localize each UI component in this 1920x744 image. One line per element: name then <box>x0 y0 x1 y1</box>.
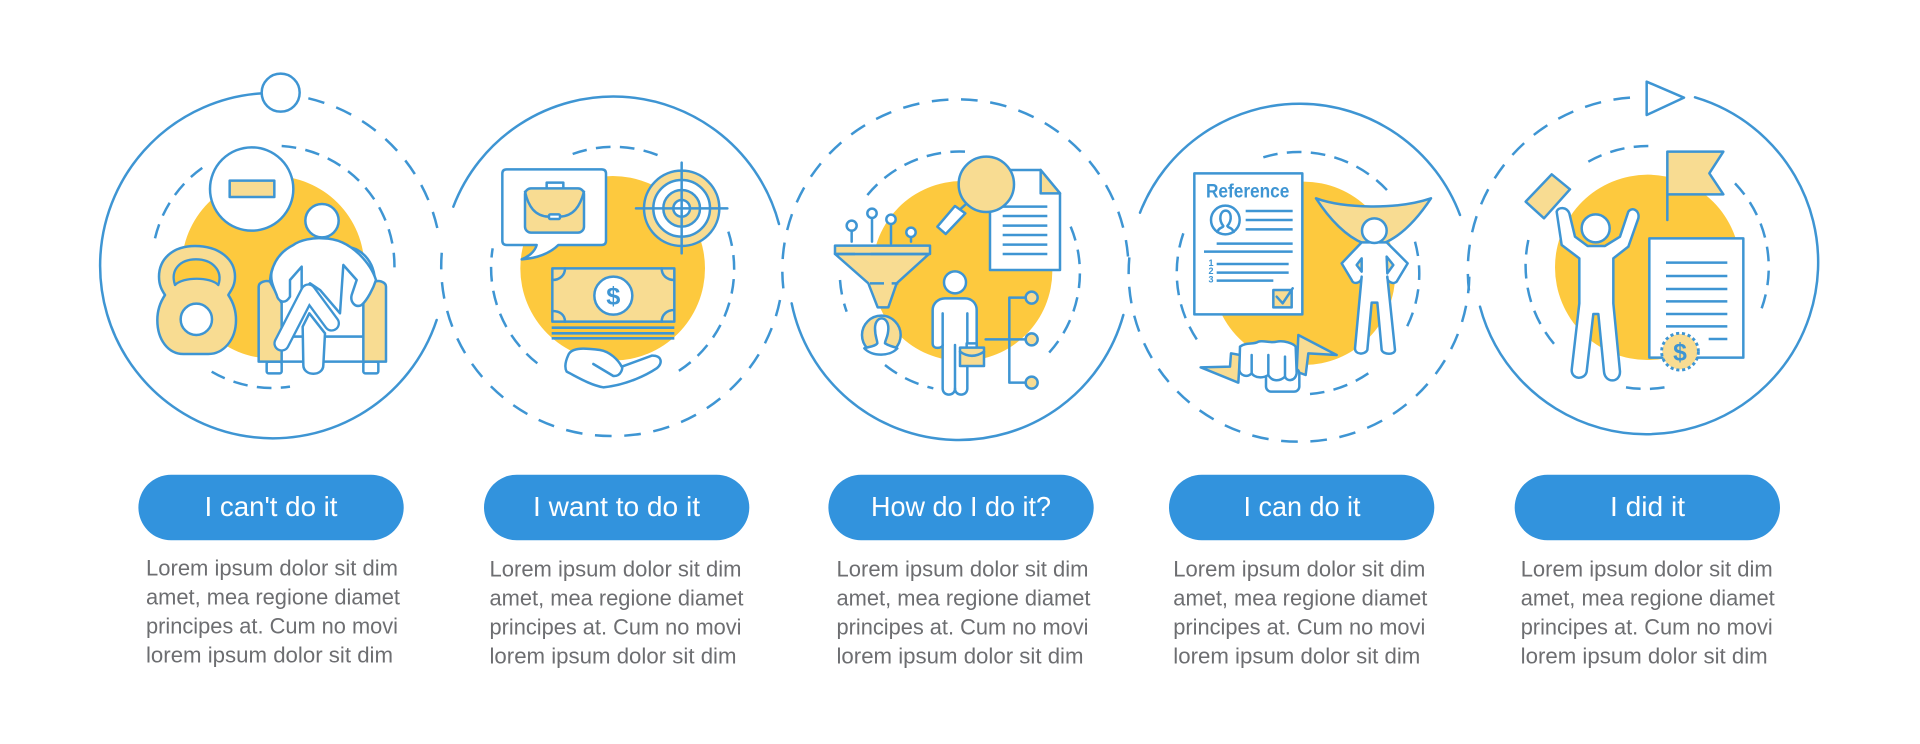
icon: kettlebell <box>157 246 236 354</box>
text block: step 5 description: lorem ipsum dolor sit dim <box>1521 643 1768 668</box>
icon: reference document <box>1194 173 1302 314</box>
outer solid ring <box>1140 104 1460 215</box>
icon: reference document: 2 <box>1208 266 1213 276</box>
text block: step 1 description: Lorem ipsum dolor sit dim <box>146 556 398 581</box>
yellow backdrop circle <box>1212 182 1395 365</box>
outer dashed ring <box>1129 247 1469 442</box>
text block: step 3 description: principes at. Cum no movi <box>836 614 1088 640</box>
yellow backdrop circle <box>1555 175 1740 360</box>
yellow backdrop circle <box>872 181 1052 361</box>
panel: I want to do it illustration <box>441 97 780 436</box>
icon: contract document <box>1649 238 1743 358</box>
icon: user avatar <box>862 316 901 355</box>
label pill: I can't do it: I can't do it <box>204 491 338 522</box>
ring start marker <box>262 74 300 112</box>
text block: step 4 description: Lorem ipsum dolor sit dim <box>1173 557 1425 582</box>
label pill: How do I do it? <box>828 475 1094 540</box>
label pill: I can do it <box>1169 475 1434 540</box>
text block: step 4 description: principes at. Cum no movi <box>1173 614 1425 640</box>
label pill: I did it <box>1515 475 1780 540</box>
icon: magnifying glass <box>937 157 1014 234</box>
icon: seated person <box>271 204 376 374</box>
panel: How do I do it illustration <box>782 99 1128 440</box>
text block: step 1 description: principes at. Cum no movi <box>146 613 398 638</box>
inner dashed ring <box>840 152 1080 388</box>
arrow marker <box>1647 82 1684 115</box>
text block: step 5 description: Lorem ipsum dolor sit dim <box>1521 557 1773 582</box>
text block: step 1 description <box>146 556 400 667</box>
outer dashed ring <box>441 250 780 436</box>
label pill: I want to do it <box>484 475 749 540</box>
outer solid ring <box>100 93 437 438</box>
label pill: I can't do it <box>138 475 404 540</box>
outer dashed ring <box>782 99 1128 288</box>
label pill: I did it: I did it <box>1610 491 1685 522</box>
icon: dollar seal: $ <box>1673 339 1687 366</box>
inner dashed ring <box>1177 152 1419 394</box>
text block: step 2 description: principes at. Cum no movi <box>490 614 742 640</box>
inner dashed ring <box>155 146 394 388</box>
outer dashed ring <box>308 98 439 238</box>
panel: I can't do it illustration <box>100 74 439 438</box>
text block: step 4 description: amet, mea regione diamet <box>1173 586 1427 610</box>
text block: step 2 description: Lorem ipsum dolor sit dim <box>490 557 742 582</box>
text block: step 5 description: principes at. Cum no movi <box>1521 614 1773 640</box>
outer solid ring <box>453 97 779 224</box>
icon: reference document: 1 <box>1208 258 1213 268</box>
panel: I did it illustration <box>1468 82 1818 434</box>
icon: open hand <box>565 349 661 387</box>
icon: armchair <box>259 247 386 373</box>
label pill: How do I do it?: How do I do it? <box>871 491 1051 522</box>
icon: card in raised hand <box>1526 174 1570 218</box>
text block: step 1 description: lorem ipsum dolor sit dim <box>146 642 393 667</box>
text block: step 5 description: amet, mea regione diamet <box>1521 586 1775 610</box>
panel: I can do it illustration <box>1129 104 1469 442</box>
text block: step 2 description <box>490 557 744 668</box>
icon: cheering person <box>1557 208 1639 380</box>
icon: branching network <box>986 292 1038 389</box>
label pill: I can do it: I can do it <box>1244 491 1361 522</box>
outer solid ring <box>1480 97 1818 434</box>
text block: step 5 description <box>1521 557 1775 668</box>
text block: step 1 description: amet, mea regione diamet <box>146 584 400 609</box>
outer dashed ring <box>1468 98 1630 293</box>
label pill: I want to do it: I want to do it <box>533 491 700 522</box>
yellow backdrop circle <box>182 176 364 359</box>
icon: banknote stack <box>552 268 674 338</box>
icon: dollar seal <box>1662 334 1698 369</box>
inner dashed ring <box>491 147 734 373</box>
outer solid ring <box>792 303 1123 440</box>
text block: step 4 description: lorem ipsum dolor sit dim <box>1173 643 1420 668</box>
text block: step 3 description: lorem ipsum dolor sit dim <box>836 643 1084 668</box>
icon: target <box>636 163 727 253</box>
text block: step 4 description <box>1173 557 1427 668</box>
icon: flag <box>1667 152 1723 220</box>
text block: step 2 description: lorem ipsum dolor sit dim <box>490 643 736 668</box>
icon: fist with lightning <box>1201 335 1337 392</box>
icon: minus sign <box>210 147 293 231</box>
icon: reference document: Reference <box>1206 181 1290 202</box>
icon: speech bubble with briefcase <box>502 169 606 259</box>
icon: filter funnel with pins <box>835 209 930 307</box>
icon: banknote stack: $ <box>606 283 620 311</box>
text block: step 3 description: amet, mea regione diamet <box>836 586 1090 610</box>
icon: document <box>990 170 1060 270</box>
icon: person with briefcase <box>933 271 984 395</box>
inner dashed ring <box>1526 146 1769 389</box>
text block: step 3 description <box>836 557 1090 668</box>
text block: step 3 description: Lorem ipsum dolor sit dim <box>836 557 1088 582</box>
text block: step 2 description: amet, mea regione diamet <box>490 586 744 610</box>
icon: reference document: 3 <box>1208 274 1213 284</box>
icon: caped hero <box>1316 198 1431 354</box>
yellow backdrop circle <box>520 176 705 361</box>
